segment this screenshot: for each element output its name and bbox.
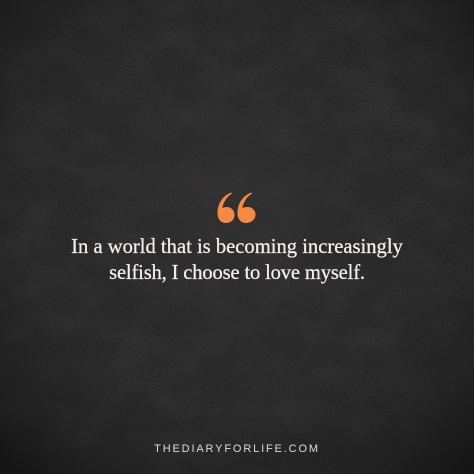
text block: quote [71,236,403,284]
footer: website: THEDIARYFORLIFE.COM [154,443,320,455]
text block: quote: In a world that is becoming increasingly [71,236,403,258]
text block: quote: selfish, I choose to love myself. [109,262,365,284]
icon: orange quotation mark [218,192,256,223]
